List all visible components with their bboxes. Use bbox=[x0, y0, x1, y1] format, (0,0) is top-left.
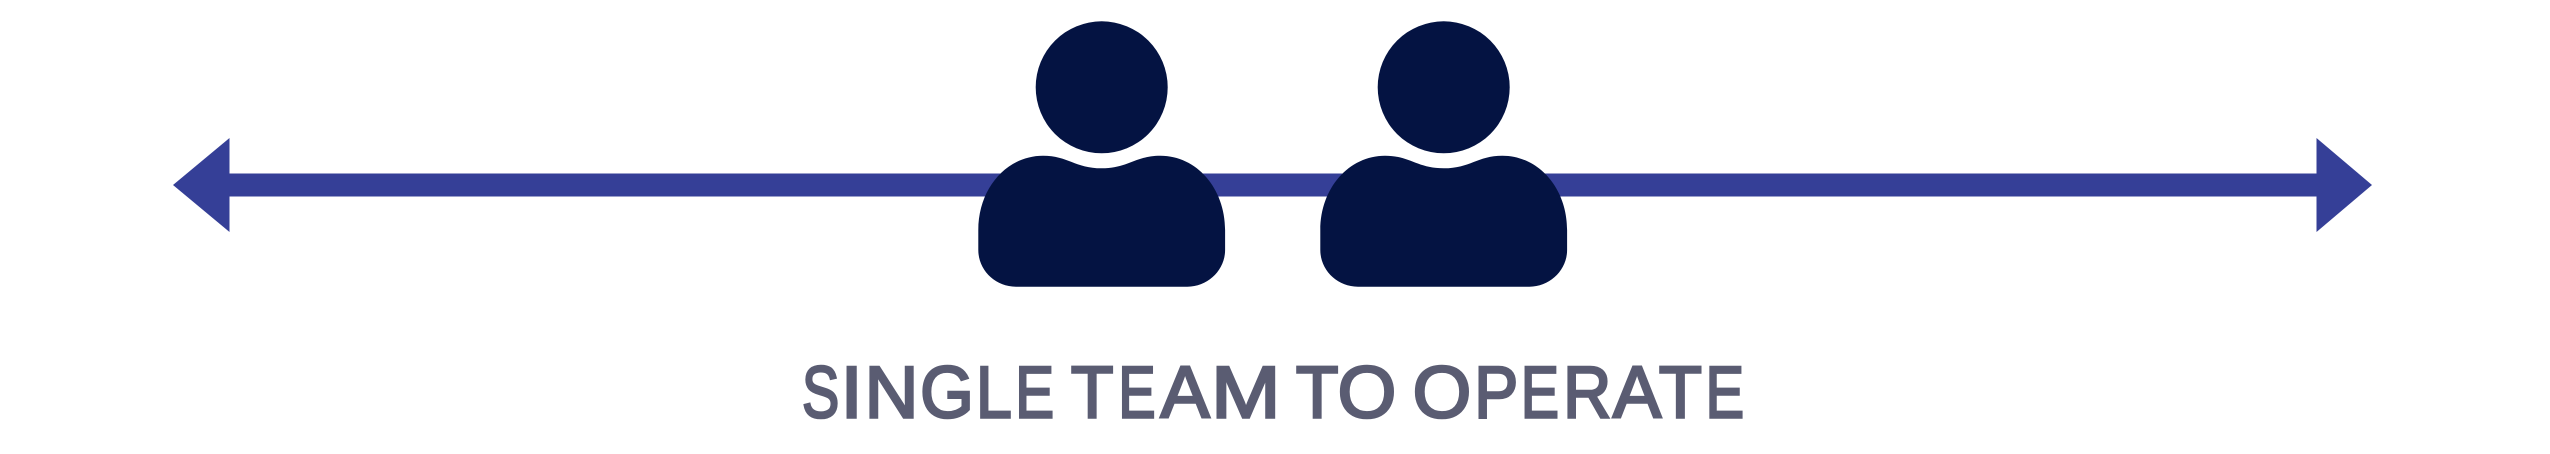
caption: I bbox=[841, 351, 863, 434]
caption: A bbox=[1613, 351, 1661, 434]
caption: O bbox=[1338, 351, 1396, 434]
caption: R bbox=[1563, 351, 1611, 434]
caption: E bbox=[1118, 351, 1156, 434]
double-headed arrow bbox=[173, 138, 2372, 232]
caption: P bbox=[1474, 351, 1518, 434]
caption: E bbox=[1521, 351, 1559, 434]
caption: S bbox=[802, 351, 839, 434]
caption: T bbox=[1659, 351, 1702, 434]
caption: T bbox=[1296, 351, 1338, 434]
caption: N bbox=[865, 351, 918, 434]
caption: M bbox=[1211, 351, 1281, 434]
icon: person left bbox=[978, 21, 1225, 287]
caption: E bbox=[1015, 351, 1054, 434]
caption: E bbox=[1706, 351, 1744, 434]
caption: O bbox=[1413, 351, 1471, 434]
caption: A bbox=[1160, 351, 1210, 434]
caption: G bbox=[920, 351, 974, 434]
caption: L bbox=[976, 351, 1012, 434]
icon: person right bbox=[1320, 21, 1567, 287]
caption: T bbox=[1071, 351, 1113, 434]
